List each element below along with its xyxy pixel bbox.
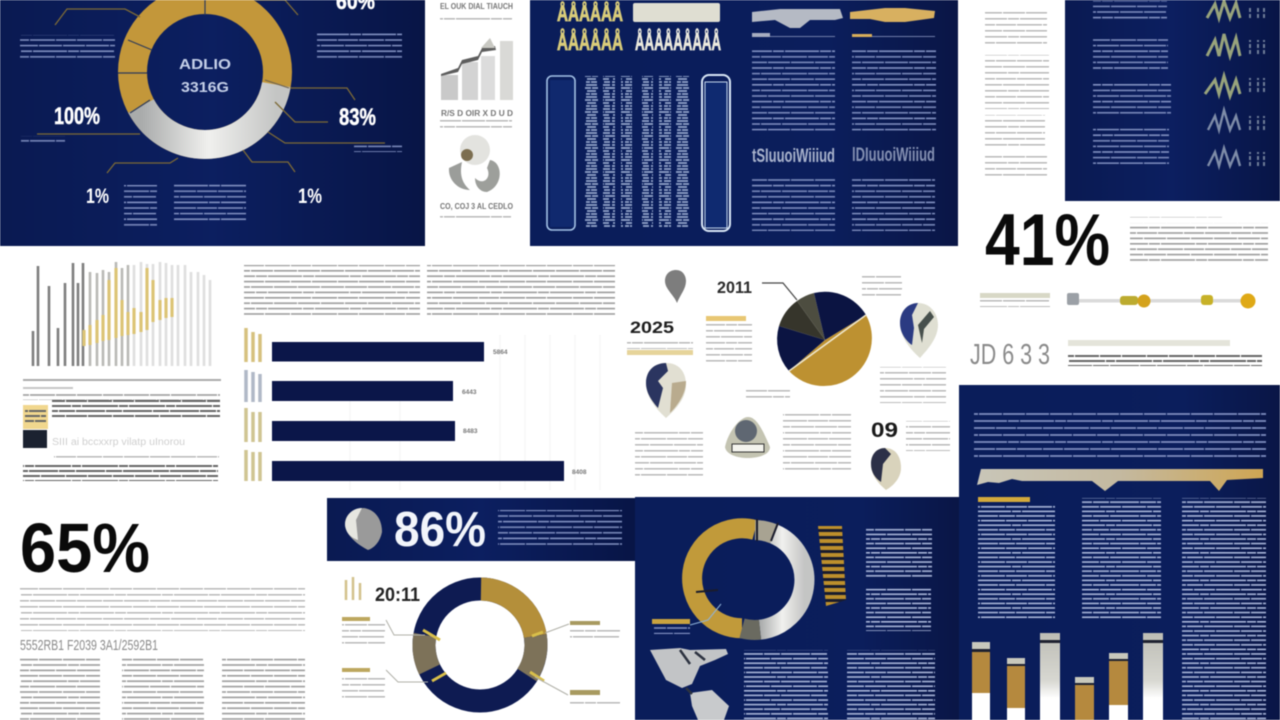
bar values: 8483 xyxy=(463,428,478,435)
panel: bottom-centre navy xyxy=(635,497,959,720)
icon: map shield lower xyxy=(871,448,901,490)
bar values xyxy=(462,349,587,476)
banner shape: grey xyxy=(752,9,843,28)
icon: banner shield xyxy=(345,508,382,550)
icon: stepped bars xyxy=(441,38,513,100)
panel: bottom-right navy xyxy=(959,385,1280,720)
timeline label xyxy=(980,293,1050,307)
text columns xyxy=(978,498,1266,720)
stat: 1% left: 1% xyxy=(86,185,109,208)
bar values: 5864 xyxy=(493,349,508,356)
icon row: gold figures: ÅÅÅÅÅÅ xyxy=(557,0,623,26)
icons: figure groups xyxy=(1205,1,1264,166)
donut chart: lower xyxy=(423,589,544,701)
icon: three-lobe emblem xyxy=(449,135,500,192)
heading rule: gold xyxy=(852,34,935,37)
panel: top-right navy xyxy=(1065,0,1280,201)
text blocks xyxy=(1093,1,1171,164)
chart notes xyxy=(23,379,221,481)
intro text xyxy=(974,412,1266,461)
ribbon banner xyxy=(977,469,1263,491)
icon: map shield left xyxy=(646,363,686,418)
donut center label xyxy=(179,56,231,96)
heading: 65% section: 5552RB1 F2039 3A1/2592B1 xyxy=(20,637,158,654)
map xyxy=(650,648,729,720)
panel: top-centre navy xyxy=(530,0,958,246)
panel: 86% banner xyxy=(327,498,635,561)
gold striped strip xyxy=(818,526,846,606)
stacked bar chart xyxy=(972,633,1163,720)
label: 20:11 xyxy=(346,577,420,606)
donut label xyxy=(652,604,721,634)
text: two-column intro xyxy=(244,265,615,315)
icon row: white figures: ÅÅÅÅÅÅÅÅÅ xyxy=(635,28,721,56)
label: 2025: 2025 xyxy=(630,318,674,337)
pie leader line xyxy=(762,283,797,300)
panel: top-centre narrow white column xyxy=(440,2,513,222)
heading: CO, COJ 3 AL CEDLO xyxy=(440,202,513,211)
vertical text columns xyxy=(585,76,689,227)
outlined column right xyxy=(702,75,730,231)
text blocks xyxy=(20,30,402,227)
heading: R/S D OIR X D U D xyxy=(441,109,513,118)
stat: 83%: 83% xyxy=(339,104,376,131)
scribbled headings xyxy=(752,145,935,167)
icon row: gold figures xyxy=(557,0,623,56)
icon: book badge xyxy=(725,417,770,458)
caption lines xyxy=(1068,340,1262,366)
text columns xyxy=(752,47,936,231)
scribbled headings: lDIuuoiWiiiud xyxy=(852,145,935,166)
column chart: vertical strokes xyxy=(33,262,210,366)
donut center label: 3316G xyxy=(181,79,229,96)
label: 09: 09 xyxy=(871,419,898,442)
bar row icons xyxy=(246,328,260,481)
bars xyxy=(272,342,564,481)
banner text xyxy=(498,510,622,548)
stat: 41%: 41% xyxy=(985,200,1110,281)
text blocks xyxy=(744,527,935,720)
label: 20:11: 20:11 xyxy=(375,585,420,606)
beaded line xyxy=(1067,293,1256,308)
pie text blocks xyxy=(627,273,950,476)
gold heading xyxy=(978,497,1030,502)
stat: 100%: 100% xyxy=(54,103,100,130)
heading: EL OUK DIAL TIAUCH xyxy=(440,2,513,11)
panel: top-left donut xyxy=(0,0,425,246)
outlined column left xyxy=(547,76,575,230)
label: 2011: 2011 xyxy=(717,278,752,297)
donut chart: gold and silver ring xyxy=(118,0,289,144)
connector lines xyxy=(37,0,385,173)
timeline row xyxy=(980,293,1256,308)
icon row: gold figures: ÅÅÅÅÅÅ xyxy=(557,28,623,56)
donut center label: ADLIO xyxy=(179,56,231,73)
pie chart xyxy=(777,292,872,386)
donut connectors xyxy=(386,620,569,695)
donut labels xyxy=(342,617,620,706)
scribble numerals: JD 6 3 3 xyxy=(970,339,1050,371)
bar chart: horizontal xyxy=(246,328,600,490)
banner shape: gold xyxy=(850,8,935,22)
icon row: white figures xyxy=(633,3,721,56)
chart notes: SIII ai bccxxrp vilatp uInorou xyxy=(52,437,185,448)
scribbled headings: tSIuuoiWiiiud xyxy=(752,146,835,167)
stat: 1% right: 1% xyxy=(298,185,322,208)
icon: map pin xyxy=(665,270,686,303)
icon: map shield right xyxy=(900,303,938,358)
text: 65% body xyxy=(20,588,305,631)
bar values: 8408 xyxy=(572,469,587,476)
bar values: 6443 xyxy=(462,389,477,396)
donut chart: gold and silver xyxy=(692,519,804,630)
stat: 65%: 65% xyxy=(20,509,150,587)
stat: 86%: 86% xyxy=(394,503,486,557)
text block: 41% note xyxy=(1130,217,1268,263)
text: three columns xyxy=(20,657,305,720)
text column: top-right white xyxy=(985,9,1049,176)
heading rule: grey xyxy=(752,33,835,37)
